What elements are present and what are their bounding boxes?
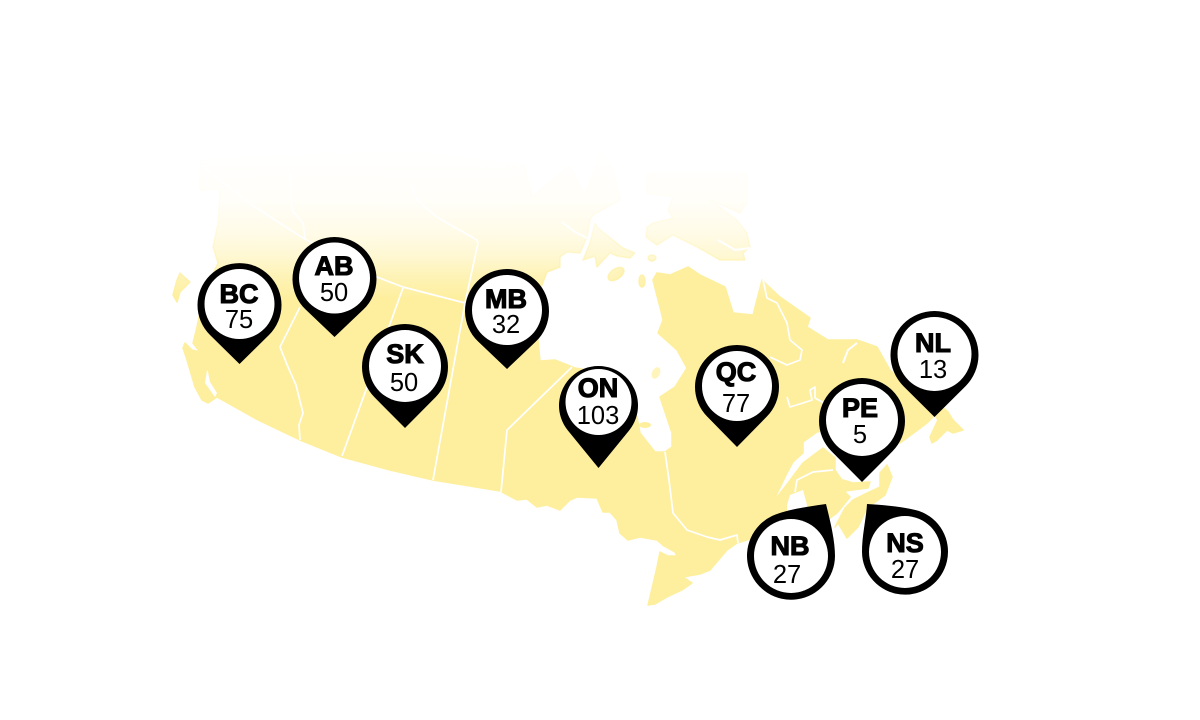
pin: NB 27: 27 xyxy=(773,561,801,589)
northern Quebec, solid colour xyxy=(653,267,733,313)
pin: SK 50: 50 xyxy=(390,369,418,397)
pin: PE 5 xyxy=(819,378,905,482)
pin: MB 32: 32 xyxy=(492,311,520,339)
pin: SK 50: SK xyxy=(386,339,424,369)
provincial borders xyxy=(207,170,833,543)
pin: BC 75 xyxy=(198,263,282,364)
Nova Scotia xyxy=(835,465,892,538)
small Hudson islands xyxy=(606,265,626,283)
pin: QC 77: QC xyxy=(716,357,756,387)
pin: AB 50: AB xyxy=(314,251,354,281)
pin: BC 75: BC xyxy=(220,279,258,309)
Haida Gwaii xyxy=(173,273,190,302)
Prince Edward Island xyxy=(843,480,870,491)
pin: MB 32: MB xyxy=(485,284,527,314)
pin: NL 13: NL xyxy=(915,328,951,358)
pin: NB 27 xyxy=(747,504,835,600)
pin: PE 5: PE xyxy=(842,393,878,423)
pin: MB 32 xyxy=(465,269,549,369)
pin: NL 13: 13 xyxy=(919,356,947,384)
water and inlets xyxy=(205,222,857,517)
pin: NS 27: 27 xyxy=(891,556,919,584)
Southampton island xyxy=(583,223,635,267)
pin: QC 77: 77 xyxy=(722,390,750,418)
pin: AB 50: 50 xyxy=(320,279,348,307)
mainland xyxy=(183,150,963,605)
pin: ON 103 xyxy=(559,366,638,468)
pin: ON 103: 103 xyxy=(577,402,619,430)
pin: PE 5: 5 xyxy=(853,421,867,449)
Baffin island xyxy=(646,173,750,260)
pin: NS 27 xyxy=(862,504,948,595)
pin: ON 103: ON xyxy=(578,373,618,403)
pin: NB 27: NB xyxy=(770,531,810,561)
pin: NL 13 xyxy=(890,311,978,417)
pin: BC 75: 75 xyxy=(225,306,253,334)
pin: NS 27: NS xyxy=(886,528,924,558)
pin: QC 77 xyxy=(695,345,779,447)
map of Canada xyxy=(173,150,963,605)
pin: SK 50 xyxy=(362,324,448,428)
pin: AB 50 xyxy=(292,237,376,337)
